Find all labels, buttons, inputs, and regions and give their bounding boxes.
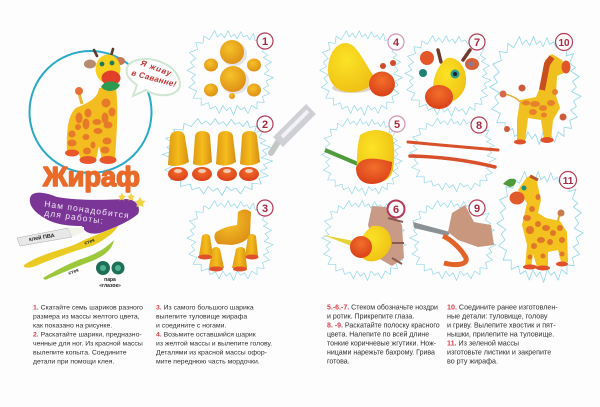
instructions column 2: вылепите туловище жирафа xyxy=(156,314,247,320)
toy eyes: пара xyxy=(104,277,116,283)
step 6 number: 6 xyxy=(393,204,399,216)
instructions column 3: готова. xyxy=(327,358,350,366)
instructions column 2: и соедините с ногами. xyxy=(156,322,226,330)
instructions column 4 xyxy=(447,304,558,366)
instructions column 3: и ротик. Прикрепите глаза. xyxy=(327,314,414,320)
instructions column 3: 5.-6.-7. Стеком обозначьте ноздри xyxy=(327,304,438,312)
step 2: cones and hooves xyxy=(162,116,273,196)
instructions column 4: ные детали: туловище, голову xyxy=(447,312,548,320)
step 5 number: 5 xyxy=(394,119,400,131)
instructions column 2: 4. Возьмите оставшийся шарик xyxy=(156,330,257,338)
step 3: assembled body xyxy=(187,200,273,280)
instructions column 1 xyxy=(33,304,143,366)
title: Жираф xyxy=(42,161,140,192)
toy eyes xyxy=(96,261,124,289)
step 8 number: 8 xyxy=(476,120,482,132)
step 1: balls xyxy=(187,31,273,115)
step 5: muzzle with tool xyxy=(322,116,405,196)
instructions column 1: вылепите копыта. Соедините xyxy=(33,350,127,356)
step 4: egg and muzzle xyxy=(320,31,404,115)
instructions column 1: ченные для ног. Из красной массы xyxy=(33,340,143,348)
speech bubble: в Саванне! xyxy=(130,68,178,89)
instructions column 1: размера из массы желтого цвета, xyxy=(33,314,140,320)
yellow modelling tool: стек xyxy=(84,237,96,247)
instructions column 4: 10. Соедините ранее изготовлен- xyxy=(447,304,558,312)
step 1 number: 1 xyxy=(262,36,268,48)
instructions column 4: 11. Из зеленой массы xyxy=(447,340,519,348)
hero circle with giraffe xyxy=(30,49,152,173)
instructions column 3: ницами нарежьте бахрому. Грива xyxy=(327,348,435,356)
glue tube label: клей ПВА xyxy=(28,232,55,243)
step 9: scissors and hand xyxy=(410,200,496,280)
instructions column 2: мите переднюю часть мордочки. xyxy=(156,358,260,366)
instructions column 4: и гриву. Вылепите хвостик и пят- xyxy=(447,322,556,330)
step 2 number: 2 xyxy=(262,119,268,131)
instructions column 2: Деталями из красной массы офор- xyxy=(156,348,267,356)
toy eyes: «глазок» xyxy=(99,283,121,289)
instructions column 2: 3. Из самого большого шарика xyxy=(156,304,254,312)
instructions column 1: 1. Скатайте семь шариков разного xyxy=(33,304,143,312)
glue tube xyxy=(271,109,311,153)
step 3 number: 3 xyxy=(262,203,268,215)
step 9 number: 9 xyxy=(474,203,480,215)
hero giraffe figure xyxy=(65,49,125,164)
glue tube label xyxy=(17,227,84,246)
yellow modelling tool xyxy=(24,226,118,268)
instructions column 2: из желтой массы и вылепите голову. xyxy=(156,340,272,348)
instructions column 2 xyxy=(156,304,272,366)
purple banner with text: Нам понадобится xyxy=(44,199,130,220)
step 7 number: 7 xyxy=(474,37,480,49)
instructions column 3 xyxy=(327,304,440,366)
step 4 number: 4 xyxy=(393,37,400,49)
purple banner with text xyxy=(30,193,146,234)
step 6: hand with head xyxy=(322,200,406,280)
step 8: red strips xyxy=(408,117,498,192)
instructions column 4: нышки, прилепите на туловище. xyxy=(447,330,554,338)
speech bubble xyxy=(127,58,180,96)
green modelling tool: стек xyxy=(68,267,80,277)
instructions column 1: как показано на рисунке. xyxy=(33,322,112,330)
step 7: head xyxy=(405,34,491,116)
step 10: giraffe parts xyxy=(490,34,581,145)
step 11: finished giraffe xyxy=(497,172,583,282)
instructions column 4: во рту жирафа. xyxy=(447,358,498,366)
instructions column 1: детали при помощи клея. xyxy=(33,358,114,366)
step 11 number: 11 xyxy=(563,176,574,187)
purple banner with text: для работы: xyxy=(44,208,104,226)
instructions column 3: цвета. Налепите по всей длине xyxy=(327,330,429,338)
step 10 number: 10 xyxy=(558,38,570,49)
instructions column 1: 2. Раскатайте шарики, предназно- xyxy=(33,330,142,338)
instructions column 4: изготовьте листики и закрепите xyxy=(447,348,551,356)
green modelling tool xyxy=(43,240,114,280)
speech bubble: Я живу xyxy=(138,58,173,78)
instructions column 3: 8. -9. Раскатайте полоску красного xyxy=(327,322,440,330)
instructions column 3: тонкие коричневые жгутики. Нож- xyxy=(327,340,437,348)
